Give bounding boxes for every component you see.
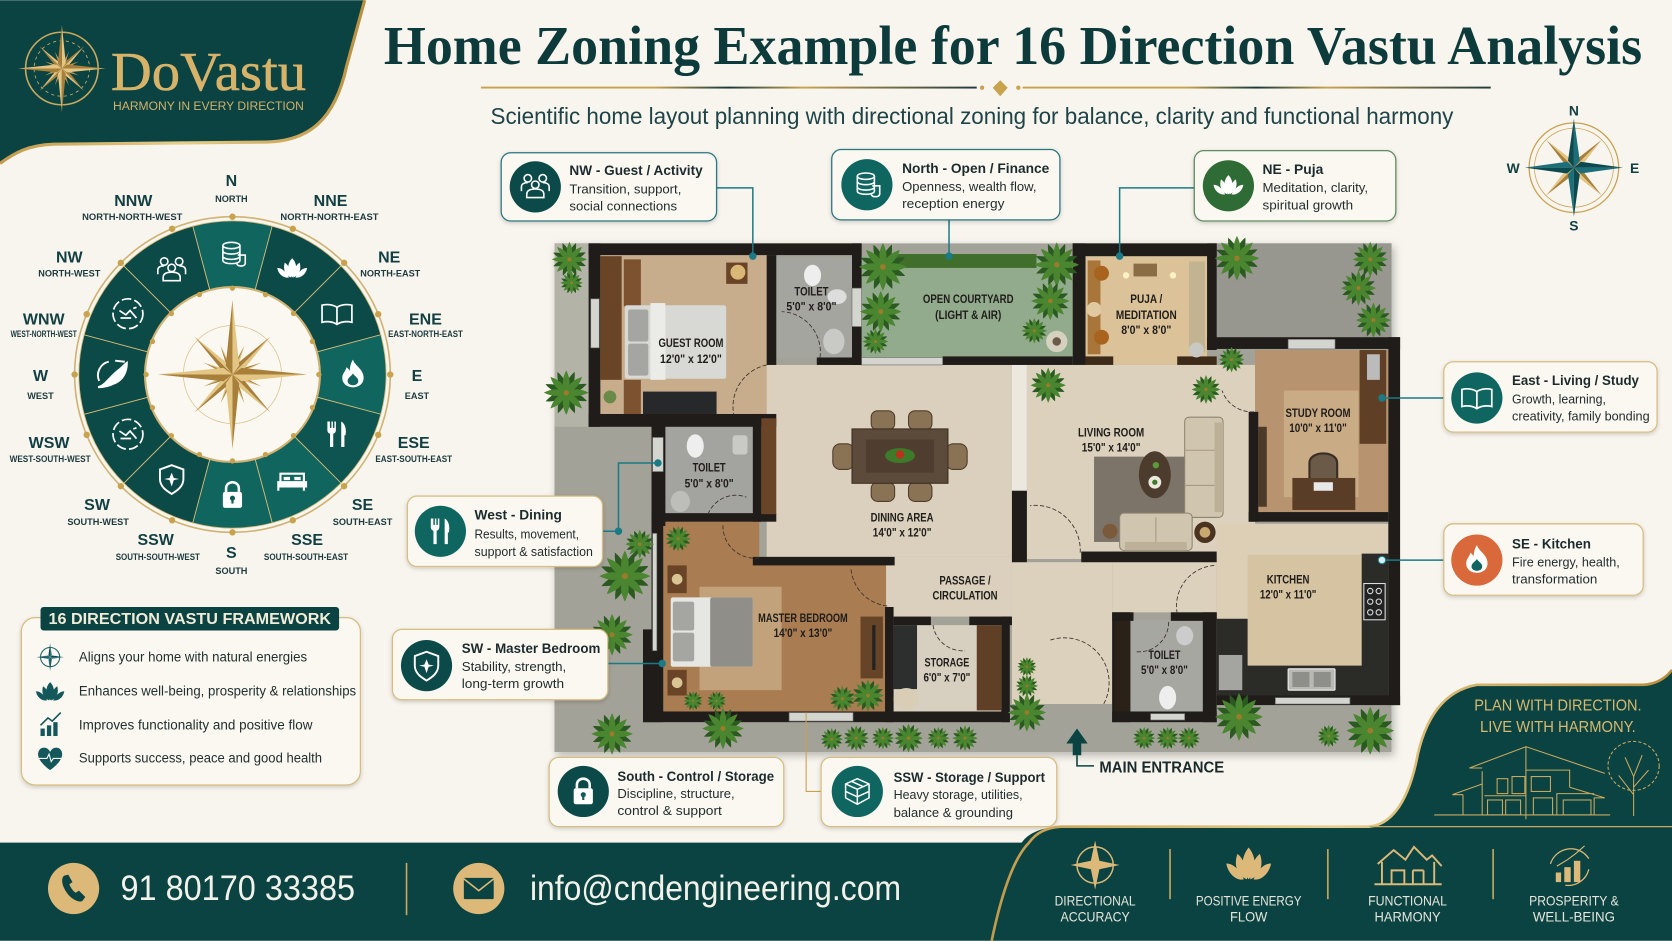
wheel direction labels: EAST — [405, 391, 430, 401]
feature: positive energy flow — [1196, 847, 1301, 925]
room labels: CIRCULATION — [933, 590, 998, 603]
callout: NE: NE - Puja — [1263, 161, 1324, 177]
framework rows: Improves functionality and positive flow — [79, 717, 313, 733]
feature: functional harmony: HARMONY — [1374, 909, 1441, 925]
room labels: 5'0" x 8'0" — [685, 478, 734, 491]
callout: NW — [501, 153, 757, 260]
callout: East: Growth, learning, — [1512, 391, 1606, 406]
wheel direction labels: SE — [352, 497, 374, 514]
feature: positive energy flow: POSITIVE ENERGY — [1196, 893, 1301, 909]
wheel direction labels: EAST-SOUTH-EAST — [375, 454, 452, 464]
wheel direction labels: WEST — [27, 391, 54, 401]
wheel direction labels: NORTH-WEST — [38, 268, 101, 278]
wheel direction labels: NORTH-EAST — [360, 268, 421, 278]
framework heading — [41, 607, 339, 630]
wheel direction labels: SOUTH — [215, 566, 247, 576]
callout: SSW: Heavy storage, utilities, — [894, 787, 1023, 802]
room labels: 12'0" x 12'0" — [660, 353, 722, 366]
wheel direction labels: NNW — [114, 193, 153, 210]
tagline: LIVE WITH HARMONY. — [1480, 719, 1636, 736]
feature: directional accuracy: ACCURACY — [1060, 909, 1130, 925]
icon: top-right compass: S — [1569, 218, 1579, 234]
wheel direction labels: NORTH — [215, 194, 248, 204]
framework rows: Aligns your home with natural energies — [79, 648, 307, 664]
wheel direction labels: ESE — [398, 435, 430, 452]
feature: prosperity: PROSPERITY & — [1529, 893, 1619, 909]
furniture: toilets — [671, 265, 1193, 711]
windows — [591, 288, 1350, 721]
wheel direction labels: SOUTH-WEST — [67, 517, 129, 527]
callout: SSW: SSW - Storage / Support — [894, 769, 1045, 785]
room labels: (LIGHT & AIR) — [935, 309, 1001, 322]
wheel direction labels — [10, 173, 463, 576]
wheel direction labels: NNE — [314, 193, 348, 210]
callout: North — [832, 150, 1060, 260]
room labels: STUDY ROOM — [1285, 407, 1351, 420]
furniture: living room — [1094, 417, 1223, 550]
callout: West: West - Dining — [475, 507, 562, 523]
callout: North: reception energy — [902, 196, 1005, 211]
room labels: 15'0" x 14'0" — [1082, 441, 1140, 454]
wheel direction labels: NW — [56, 250, 84, 267]
callout: SW: long-term growth — [462, 676, 564, 691]
room labels: STORAGE — [925, 657, 969, 670]
wheel direction labels: S — [226, 545, 237, 562]
subtitle: Scientific home layout planning with directional zoning for balance, clarity and functional harmony — [491, 103, 1454, 129]
wheel icons — [98, 242, 364, 508]
callout: North: North - Open / Finance — [902, 160, 1050, 176]
title: Home Zoning Example for 16 Direction Vastu Analysis — [384, 15, 1642, 76]
feature: directional accuracy — [1055, 841, 1136, 925]
contact: phone — [48, 863, 355, 914]
callout: North: Openness, wealth flow, — [902, 179, 1036, 194]
door arcs — [708, 312, 1254, 704]
callout: West: support & satisfaction — [475, 544, 593, 559]
callout: SW: SW - Master Bedroom — [462, 640, 600, 656]
feature: functional harmony — [1368, 847, 1447, 925]
wheel direction labels: N — [226, 173, 237, 190]
room labels: 14'0" x 13'0" — [774, 627, 832, 640]
framework rows: Enhances well-being, prosperity & relationships — [79, 682, 356, 698]
room labels: GUEST ROOM — [658, 337, 724, 350]
room labels: KITCHEN — [1267, 574, 1309, 587]
wheel direction labels: EAST-NORTH-EAST — [388, 329, 463, 339]
callout: NE — [1116, 151, 1396, 260]
callout: West — [407, 459, 662, 566]
icon: top-right compass: W — [1507, 160, 1521, 176]
brand tagline: HARMONY IN EVERY DIRECTION — [113, 100, 304, 113]
icon: logo compass — [18, 25, 106, 112]
callout: SW: Stability, strength, — [462, 659, 566, 674]
room floors — [600, 255, 1388, 711]
icon: house line drawing — [1434, 747, 1610, 819]
room labels: TOILET — [693, 462, 726, 475]
header brand panel — [0, 0, 365, 163]
walls — [589, 243, 1400, 722]
wheel direction labels: WNW — [23, 311, 65, 328]
contact: email: info@cndengineering.com — [530, 869, 901, 908]
site paving — [554, 243, 1392, 752]
icon: tree line drawing — [1608, 741, 1659, 816]
room labels: 14'0" x 12'0" — [873, 527, 931, 540]
furniture: study room — [1258, 350, 1386, 510]
callout: NW: NW - Guest / Activity — [569, 162, 703, 178]
room labels: 5'0" x 8'0" — [786, 301, 837, 314]
main entrance arrow and label: MAIN ENTRANCE — [1099, 759, 1224, 776]
tagline — [1474, 697, 1642, 736]
wheel direction labels: WEST-NORTH-WEST — [11, 329, 77, 339]
wheel direction labels: WEST-SOUTH-WEST — [10, 454, 91, 464]
callout: SSW: balance & grounding — [894, 805, 1013, 820]
callout: South — [549, 757, 784, 827]
wheel direction labels: NE — [378, 250, 401, 267]
callout: NW: Transition, support, — [569, 181, 681, 196]
callout: SW — [392, 629, 666, 700]
wheel direction labels: WSW — [29, 435, 70, 452]
callout: SSW — [806, 713, 1057, 827]
callout: SE — [1378, 524, 1643, 595]
furniture: guest room — [600, 256, 747, 414]
wheel direction labels: SSE — [291, 532, 323, 549]
callout: South: South - Control / Storage — [617, 768, 774, 784]
kitchen counter — [1217, 554, 1388, 695]
room labels: 12'0" x 11'0" — [1260, 588, 1316, 601]
callout: SE: SE - Kitchen — [1512, 535, 1591, 551]
tagline: PLAN WITH DIRECTION. — [1474, 697, 1642, 714]
wheel direction labels: SW — [84, 497, 111, 514]
room labels: 5'0" x 8'0" — [1141, 664, 1188, 677]
furniture: storage — [894, 625, 1001, 710]
wheel direction labels: SOUTH-SOUTH-EAST — [264, 552, 349, 562]
callout: West: Results, movement, — [475, 527, 579, 542]
room labels: MASTER BEDROOM — [758, 612, 848, 625]
feature: prosperity — [1529, 846, 1619, 925]
furniture: puja room — [1087, 260, 1205, 357]
panel: framework — [21, 607, 360, 785]
wheel direction labels: SOUTH-EAST — [333, 517, 393, 527]
room labels: PUJA / — [1130, 293, 1163, 306]
framework rows — [36, 643, 356, 770]
callout: East — [1378, 362, 1657, 432]
wheel direction labels: E — [412, 368, 423, 385]
framework heading: 16 DIRECTION VASTU FRAMEWORK — [49, 611, 332, 628]
wheel direction labels: ENE — [409, 311, 442, 328]
floor plan — [544, 236, 1400, 755]
contact: phone: 91 80170 33385 — [120, 869, 355, 908]
callout: SE: Fire energy, health, — [1512, 554, 1620, 569]
feature: prosperity: WELL-BEING — [1533, 909, 1615, 925]
callout: NE: spiritual growth — [1263, 197, 1353, 212]
icon: top-right compass — [1507, 102, 1639, 234]
wheel direction labels: W — [33, 368, 49, 385]
room labels: 6'0" x 7'0" — [923, 672, 970, 685]
footer band — [0, 670, 1672, 941]
framework rows: Supports success, peace and good health — [79, 750, 322, 766]
wheel direction labels: SSW — [137, 532, 175, 549]
room labels: 8'0" x 8'0" — [1121, 324, 1171, 337]
room labels: TOILET — [1148, 649, 1181, 662]
furniture: master bedroom — [668, 565, 883, 695]
main entrance arrow and label — [1066, 729, 1224, 776]
wheel direction labels: SOUTH-SOUTH-WEST — [116, 552, 200, 562]
icon: wheel compass rose — [158, 300, 307, 449]
room labels: PASSAGE / — [939, 575, 991, 588]
callout: East: creativity, family bonding — [1512, 408, 1650, 423]
icon: top-right compass: E — [1630, 160, 1639, 176]
feature: positive energy flow: FLOW — [1230, 909, 1268, 925]
room labels: TOILET — [794, 286, 829, 299]
wheel direction labels: NORTH-NORTH-WEST — [82, 212, 183, 222]
direction wheel — [71, 214, 393, 536]
room labels: MEDITATION — [1116, 309, 1177, 322]
room labels — [658, 286, 1351, 685]
callout: NE: Meditation, clarity, — [1263, 180, 1368, 195]
room labels: LIVING ROOM — [1078, 426, 1144, 439]
callout: South: control & support — [617, 803, 722, 818]
callout: East: East - Living / Study — [1512, 372, 1639, 388]
callout: NW: social connections — [569, 198, 677, 213]
feature: directional accuracy: DIRECTIONAL — [1055, 893, 1136, 909]
callout: SE: transformation — [1512, 572, 1597, 587]
contact: email — [453, 863, 901, 914]
wheel direction labels: NORTH-NORTH-EAST — [280, 212, 379, 222]
room labels: DINING AREA — [871, 512, 934, 525]
callout: South: Discipline, structure, — [617, 786, 735, 801]
icon: top-right compass: N — [1569, 102, 1579, 118]
plants — [544, 236, 1394, 755]
room labels: OPEN COURTYARD — [923, 293, 1014, 306]
furniture: dining set — [833, 411, 967, 501]
feature: functional harmony: FUNCTIONAL — [1368, 893, 1447, 909]
brand name: DoVastu — [111, 41, 306, 102]
room labels: 10'0" x 11'0" — [1289, 422, 1347, 435]
